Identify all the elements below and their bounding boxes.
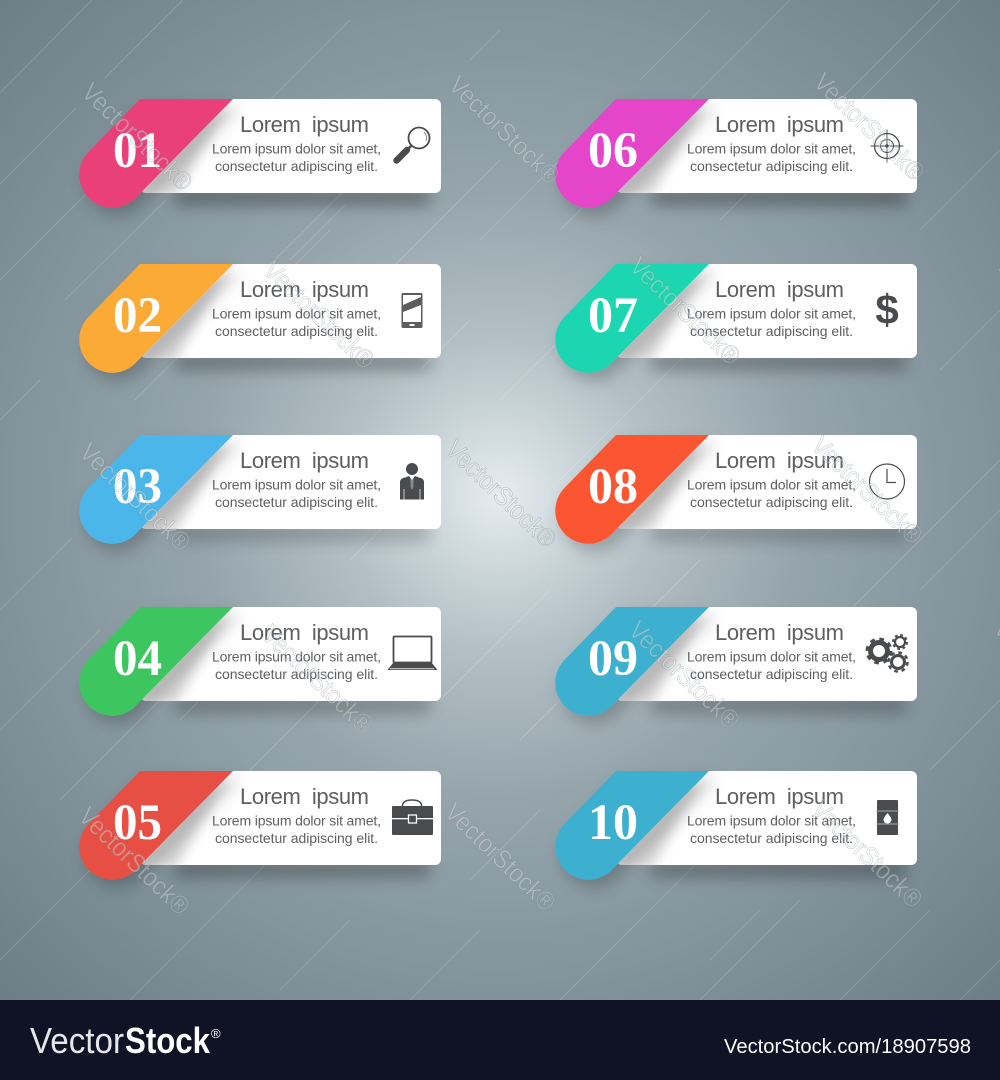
card 09 fold shadow (618, 625, 696, 701)
card 04 (79, 607, 441, 716)
icon: magnifier (396, 128, 430, 160)
card 04 panel (140, 607, 441, 701)
card 04 description: consectetur adipiscing elit. (215, 666, 378, 682)
card 04 title: Lorem ipsum (240, 620, 369, 645)
icon: businessman (400, 463, 424, 500)
card 05 number: 05 (113, 795, 162, 851)
watermarks: VectorStock® (76, 77, 199, 197)
watermarks: VectorStock® (440, 434, 563, 554)
card 05 (79, 771, 441, 880)
watermarks: VectorStock® (624, 251, 747, 371)
card 10 (555, 771, 917, 880)
watermarks: VectorStock® (258, 255, 381, 375)
card 03 description: Lorem ipsum dolor sit amet, (212, 476, 381, 492)
card 03 (79, 435, 441, 544)
card 02 number: 02 (113, 288, 162, 344)
watermarks: VectorStock® (623, 615, 746, 735)
card 02 description: Lorem ipsum dolor sit amet, (212, 306, 381, 322)
card 10 title: Lorem ipsum (715, 784, 844, 809)
card 07 description: Lorem ipsum dolor sit amet, (687, 306, 856, 322)
icon: clock (870, 464, 904, 499)
card 09 number: 09 (588, 631, 638, 687)
card 07 description: consectetur adipiscing elit. (690, 323, 853, 339)
card 06 fold shadow (618, 117, 696, 193)
card 07 panel (616, 264, 917, 358)
card 02 title: Lorem ipsum (240, 277, 369, 302)
footer image id: VectorStock.com/18907598 (724, 1036, 971, 1058)
card 08 fold shadow (618, 453, 696, 529)
card 01 title: Lorem ipsum (240, 112, 369, 137)
card 07 title: Lorem ipsum (715, 277, 844, 302)
card 01 description: Lorem ipsum dolor sit amet, (212, 140, 381, 156)
card 07 number tab (555, 264, 709, 373)
watermarks: VectorStock® (439, 797, 562, 917)
card 03 panel (140, 435, 441, 529)
card 10 description: Lorem ipsum dolor sit amet, (687, 812, 856, 828)
watermarks: VectorStock® (256, 619, 379, 739)
card 02 number tab (79, 264, 233, 373)
card 01 description (212, 140, 381, 174)
card 03 fold shadow (142, 453, 220, 529)
card 08 description: consectetur adipiscing elit. (690, 494, 853, 510)
card 06 title: Lorem ipsum (715, 112, 844, 137)
card 08 shadow (651, 526, 906, 540)
watermarks: VectorStock® (443, 70, 566, 190)
card 02 description: consectetur adipiscing elit. (215, 323, 378, 339)
card 05 fold shadow (142, 789, 220, 865)
card 09 description: Lorem ipsum dolor sit amet, (687, 648, 856, 664)
card 07 description (687, 306, 856, 339)
card 06 shadow (651, 190, 906, 204)
card 08 panel (616, 435, 917, 529)
card 04 fold shadow (142, 625, 220, 701)
card 01 fold shadow (142, 117, 220, 193)
card 05 shadow (175, 862, 430, 876)
card 02 panel (140, 264, 441, 358)
watermarks: VectorStock® (73, 801, 196, 921)
card 09 shadow (651, 698, 906, 712)
card 07 (555, 264, 917, 373)
icon: oil barrel (876, 800, 899, 835)
card 10 fold shadow (618, 789, 696, 865)
card 02 description (212, 306, 381, 339)
card 02 fold shadow (142, 282, 220, 358)
card 06 number: 06 (588, 123, 638, 179)
card 06 description: Lorem ipsum dolor sit amet, (687, 140, 856, 156)
card 08 (555, 435, 917, 544)
card 02 (79, 264, 441, 373)
card 03 description (212, 476, 381, 510)
card 06 description: consectetur adipiscing elit. (690, 158, 853, 174)
icon: gears (867, 635, 908, 672)
card 06 description (687, 140, 856, 174)
card 04 number tab (79, 607, 233, 716)
card 09 number tab (555, 607, 709, 716)
watermarks: VectorStock® (808, 67, 931, 187)
card 03 number: 03 (113, 459, 162, 515)
icon: target (870, 130, 904, 162)
card 08 description (687, 476, 856, 510)
card 10 description (687, 812, 856, 846)
card 01 (79, 99, 441, 208)
icon: laptop (388, 636, 438, 670)
card 07 number: 07 (588, 288, 638, 344)
icon: dollar: $ (875, 286, 899, 333)
card 08 title: Lorem ipsum (715, 448, 844, 473)
card 05 description: Lorem ipsum dolor sit amet, (212, 812, 381, 828)
card 04 number: 04 (113, 631, 162, 687)
card 01 description: consectetur adipiscing elit. (215, 158, 378, 174)
card 04 description: Lorem ipsum dolor sit amet, (212, 648, 381, 664)
card 05 number tab (79, 771, 233, 880)
card 09 description: consectetur adipiscing elit. (690, 666, 853, 682)
card 01 number: 01 (113, 123, 162, 179)
card 06 (555, 99, 917, 208)
icon: smartphone (402, 293, 422, 328)
card 07 fold shadow (618, 282, 696, 358)
card 03 description: consectetur adipiscing elit. (215, 494, 378, 510)
card 09 description (687, 648, 856, 682)
footer bar (0, 1000, 1000, 1080)
card 05 description: consectetur adipiscing elit. (215, 830, 378, 846)
card 10 number: 10 (588, 795, 638, 851)
card 01 shadow (175, 190, 430, 204)
card 10 number tab (555, 771, 709, 880)
card 07 shadow (651, 355, 906, 369)
card 01 panel (140, 99, 441, 193)
card 09 (555, 607, 917, 716)
card 03 number tab (79, 435, 233, 544)
card 03 title: Lorem ipsum (240, 448, 369, 473)
card 03 shadow (175, 526, 430, 540)
card 04 description (212, 648, 381, 682)
card 05 panel (140, 771, 441, 865)
card 08 number: 08 (588, 459, 638, 515)
watermarks: VectorStock® (806, 430, 929, 550)
card 10 panel (616, 771, 917, 865)
card 05 title: Lorem ipsum (240, 784, 369, 809)
card 06 panel (616, 99, 917, 193)
card 09 title: Lorem ipsum (715, 620, 844, 645)
card 10 shadow (651, 862, 906, 876)
card 06 number tab (555, 99, 709, 208)
footer logo (30, 1020, 221, 1061)
card 04 shadow (175, 698, 430, 712)
footer logo: Stock (125, 1020, 211, 1061)
footer logo: Vector (30, 1020, 124, 1061)
watermarks (73, 67, 1000, 921)
card 08 number tab (555, 435, 709, 544)
card 10 description: consectetur adipiscing elit. (690, 830, 853, 846)
watermarks: VectorStock® (74, 437, 197, 557)
icon: briefcase (392, 800, 433, 835)
card 08 description: Lorem ipsum dolor sit amet, (687, 476, 856, 492)
watermarks: VectorStock® (806, 794, 929, 914)
card 05 description (212, 812, 381, 846)
card 09 panel (616, 607, 917, 701)
card 01 number tab (79, 99, 233, 208)
footer logo: ® (211, 1026, 221, 1041)
card 02 shadow (175, 355, 430, 369)
